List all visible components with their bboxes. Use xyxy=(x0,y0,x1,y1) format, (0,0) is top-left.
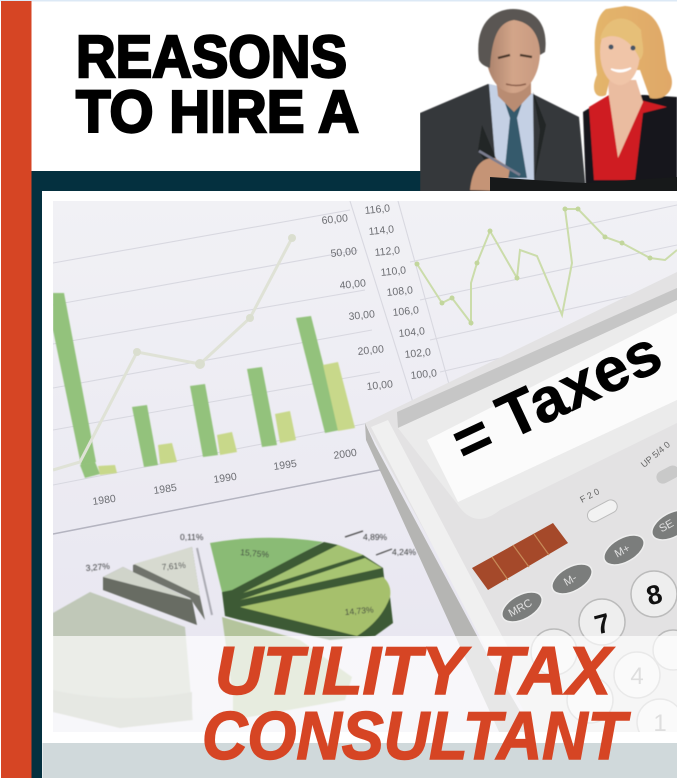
woman xyxy=(583,6,677,192)
chart axis labels: 104,0 xyxy=(398,325,426,340)
pie chart: 4,24% xyxy=(392,547,417,557)
chart axis labels: 110,0 xyxy=(380,264,407,279)
calculator xyxy=(365,272,677,745)
line chart: green xyxy=(417,209,677,323)
chart axis labels: 10,00 xyxy=(366,378,394,393)
chart axis labels xyxy=(92,202,438,508)
bottom grey band xyxy=(42,743,677,778)
chart axis labels: 20,00 xyxy=(357,343,385,358)
calculator: M- xyxy=(562,572,579,589)
chart axis labels: 116,0 xyxy=(364,202,391,217)
pie chart: 7,61% xyxy=(161,560,187,572)
subtitle xyxy=(202,633,631,774)
calculator: M+ xyxy=(613,542,632,560)
pie chart: 14,73% xyxy=(344,604,374,617)
calculator: Taxes xyxy=(487,317,672,453)
pie chart xyxy=(53,531,417,728)
photo: two consultants xyxy=(420,6,677,192)
left orange bar xyxy=(1,1,32,778)
chart axis labels: 60,00 xyxy=(321,212,349,227)
calculator: 1 xyxy=(653,710,667,737)
subtitle: UTILITY TAX xyxy=(215,633,615,709)
bar chart xyxy=(53,293,355,478)
display text: = xyxy=(442,400,504,478)
solar panel xyxy=(472,523,568,590)
calculator: UP 5/4 0 xyxy=(639,439,672,470)
chart axis labels: 100,0 xyxy=(410,367,438,382)
chart axis labels: 102,0 xyxy=(404,346,432,361)
pie chart: 4,89% xyxy=(363,532,388,542)
number keys xyxy=(531,571,677,745)
translucent title band xyxy=(53,636,677,732)
pie chart: 3,27% xyxy=(85,561,111,573)
pie chart: 15,75% xyxy=(240,547,270,560)
subtitle: CONSULTANT xyxy=(202,698,631,774)
title: REASONS xyxy=(76,24,347,90)
dark navy frame xyxy=(32,171,430,778)
chart axis labels: 1995 xyxy=(273,458,298,473)
calculator: 4 xyxy=(630,663,644,690)
chart axis labels: 1990 xyxy=(213,471,238,486)
chart axis labels: 108,0 xyxy=(386,284,414,299)
calculator: 7 xyxy=(591,607,614,640)
chart axis labels: 106,0 xyxy=(392,304,420,319)
chart axis labels: 30,00 xyxy=(348,308,376,323)
calculator: SE xyxy=(657,518,676,535)
display label xyxy=(427,313,677,502)
pie chart: 0,11% xyxy=(180,532,204,542)
chart axis labels: 2000 xyxy=(333,447,358,462)
calculator: F 2 0 xyxy=(578,486,601,505)
title xyxy=(76,24,359,145)
calculator: 8 xyxy=(643,579,665,611)
chart axis labels: 50,00 xyxy=(330,245,358,260)
chart axis labels: 40,00 xyxy=(339,277,367,292)
chart axis labels: 1985 xyxy=(153,482,178,497)
sliders xyxy=(587,499,618,522)
chart axis labels: 114,0 xyxy=(368,223,395,238)
chart axis labels: 1980 xyxy=(92,493,117,508)
main photo: charts and calculator xyxy=(53,201,677,745)
chart axis labels: 112,0 xyxy=(374,244,401,259)
buttons xyxy=(501,510,677,622)
man xyxy=(420,9,586,192)
line chart: pale xyxy=(53,238,292,470)
title: TO HIRE A xyxy=(76,79,359,145)
folder xyxy=(490,177,677,192)
paper grid xyxy=(53,201,677,534)
calculator: MRC xyxy=(507,597,534,620)
